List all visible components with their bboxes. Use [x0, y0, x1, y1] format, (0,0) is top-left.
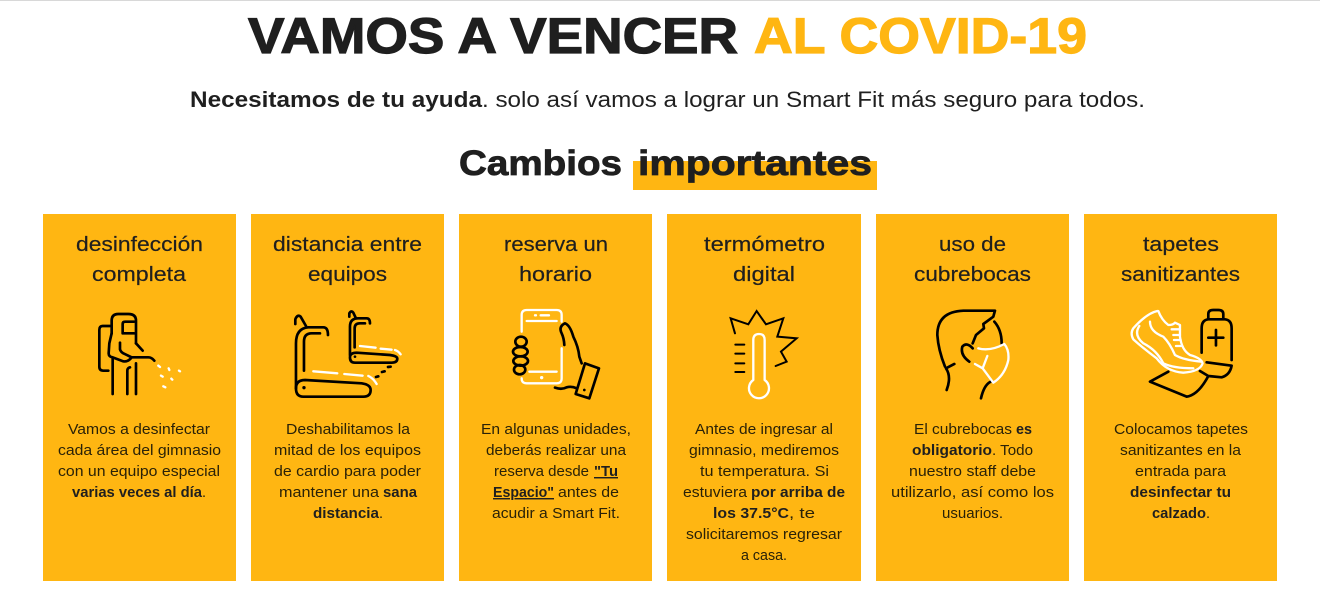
panel: termómetro digital: [667, 214, 861, 581]
title: AL COVID-19: [754, 8, 1087, 64]
text: termómetro description: los 37.5°C: [713, 506, 790, 522]
text: termómetro description: gimnasio, mediremos: [689, 443, 839, 459]
text: cubrebocas description: utilizarlo, así como los: [891, 485, 1054, 501]
subtitle: Necesitamos de tu ayuda: [190, 87, 483, 112]
text: reserva description: deberás realizar una: [486, 443, 627, 459]
text: tapetes description: desinfectar tu: [1130, 485, 1231, 501]
text: distancia description: de cardio para poder: [274, 464, 421, 480]
text: desinfección description: varias veces al día: [72, 485, 203, 501]
text: desinfección description: .: [202, 485, 206, 501]
text: tapetes description: [1114, 422, 1248, 522]
text: distancia description: [274, 422, 421, 522]
text: termómetro description: Antes de ingresar al: [695, 422, 833, 438]
text: termómetro description: [683, 422, 845, 564]
heading: uso de cubrebocas: cubrebocas: [914, 263, 1031, 286]
panel: reserva un horario: [459, 214, 652, 581]
text: termómetro description: estuviera: [683, 485, 748, 501]
heading: tapetes sanitizantes: sanitizantes: [1121, 263, 1240, 286]
text: tapetes description: Colocamos tapetes: [1114, 422, 1248, 438]
text: tapetes description: calzado: [1152, 506, 1206, 522]
heading: cambios importantes: Cambios: [459, 144, 622, 183]
heading: distancia entre equipos: distancia entre: [273, 233, 422, 256]
text: cubrebocas description: [891, 422, 1054, 522]
title: [248, 8, 1087, 64]
text: reserva description: acudir a Smart Fit.: [492, 506, 620, 522]
heading: tapetes sanitizantes: tapetes: [1143, 233, 1219, 256]
text: reserva description: reserva desde: [494, 464, 589, 480]
heading: desinfección completa: [76, 233, 203, 286]
text: reserva description: En algunas unidades,: [481, 422, 631, 438]
heading: desinfección completa: completa: [92, 263, 187, 286]
heading: termómetro digital: digital: [733, 263, 795, 286]
subtitle: . solo así vamos a lograr un Smart Fit más seguro para todos.: [482, 87, 1145, 112]
text: desinfección description: Vamos a desinfectar: [68, 422, 210, 438]
icon: thermometer: [731, 311, 797, 398]
heading: termómetro digital: termómetro: [704, 233, 825, 256]
text: distancia description: sana: [383, 485, 418, 501]
heading: cambios importantes: importantes: [638, 144, 872, 183]
text: reserva description: Espacio": [493, 485, 554, 501]
heading: distancia entre equipos: [273, 233, 422, 286]
text: reserva description: [481, 422, 631, 522]
icon: treadmills: [295, 311, 401, 397]
icon: protective suit with sprayer: [99, 314, 180, 394]
icon: hand holding phone: [513, 310, 599, 398]
text: cubrebocas description: . Todo: [992, 443, 1033, 459]
text: reserva description: antes de: [558, 485, 619, 501]
heading: cambios importantes: [459, 144, 877, 190]
text: desinfección description: cada área del gimnasio: [58, 443, 221, 459]
icon: face with mask: [937, 311, 1008, 398]
subtitle: [190, 87, 1145, 112]
heading: distancia entre equipos: equipos: [308, 263, 387, 286]
text: desinfección description: con un equipo especial: [58, 464, 220, 480]
text: cubrebocas description: El cubrebocas: [914, 422, 1012, 438]
text: distancia description: Deshabilitamos la: [286, 422, 411, 438]
heading: uso de cubrebocas: uso de: [939, 233, 1006, 256]
text: tapetes description: entrada para: [1135, 464, 1227, 480]
panel: uso de cubrebocas: [876, 214, 1069, 581]
heading: reserva un horario: [504, 233, 608, 286]
heading: uso de cubrebocas: [914, 233, 1031, 286]
panel: tapetes sanitizantes: [1084, 214, 1277, 581]
text: termómetro description: solicitaremos regresar: [686, 527, 842, 543]
text: cubrebocas description: usuarios.: [942, 506, 1003, 522]
text: termómetro description: tu temperatura. Si: [700, 464, 829, 480]
text: tapetes description: sanitizantes en la: [1120, 443, 1242, 459]
text: distancia description: distancia: [313, 506, 380, 522]
heading: desinfección completa: desinfección: [76, 233, 203, 256]
text: tapetes description: .: [1206, 506, 1210, 522]
heading: tapetes sanitizantes: [1121, 233, 1240, 286]
text: reserva description: "Tu: [594, 464, 618, 480]
title: VAMOS A VENCER: [248, 8, 738, 64]
text: cubrebocas description: es: [1016, 422, 1032, 438]
icon: shoe, sanitizer bottle and mat: [1132, 310, 1232, 397]
text: termómetro description: por arriba de: [751, 485, 845, 501]
text: distancia description: mitad de los equipos: [274, 443, 421, 459]
text: distancia description: .: [379, 506, 383, 522]
panel: desinfección completa: [43, 214, 236, 581]
text: termómetro description: , te: [789, 506, 815, 522]
heading: termómetro digital: [704, 233, 825, 286]
text: cubrebocas description: obligatorio: [912, 443, 992, 459]
heading: reserva un horario: horario: [519, 263, 592, 286]
panel: distancia entre equipos: [251, 214, 444, 581]
text: cubrebocas description: nuestro staff debe: [909, 464, 1036, 480]
text: termómetro description: a casa.: [741, 548, 787, 564]
text: distancia description: mantener una: [279, 485, 380, 501]
heading: reserva un horario: reserva un: [504, 233, 608, 256]
text: desinfección description: [58, 422, 221, 501]
